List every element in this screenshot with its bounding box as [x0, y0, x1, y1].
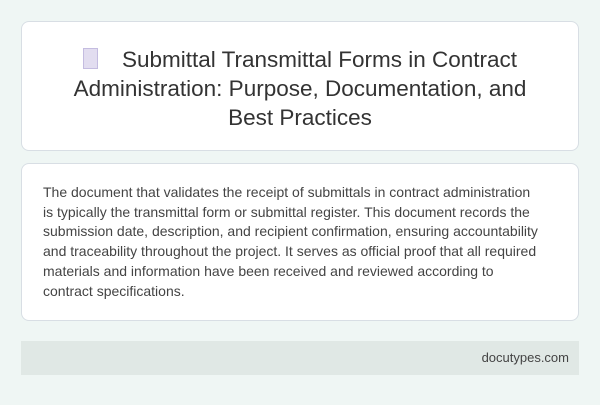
footer — [21, 341, 579, 375]
text block: The document that validates the receipt of submittals in contract administration is typically the transmittal form or submittal register. This document records the submission date, description, and recipient confirmation, ensuring accountability and traceability throughout the project. It serves as official proof that all required materials and information have been received and reviewed according to contract specifications. — [43, 184, 538, 299]
panel: description — [21, 163, 579, 321]
footer text: docutypes.com — [482, 350, 569, 365]
panel: title — [21, 21, 579, 151]
title: Submittal Transmittal Forms in Contract Administration: Purpose, Documentation, and Best Practices — [74, 47, 526, 130]
icon: document — [83, 48, 98, 69]
